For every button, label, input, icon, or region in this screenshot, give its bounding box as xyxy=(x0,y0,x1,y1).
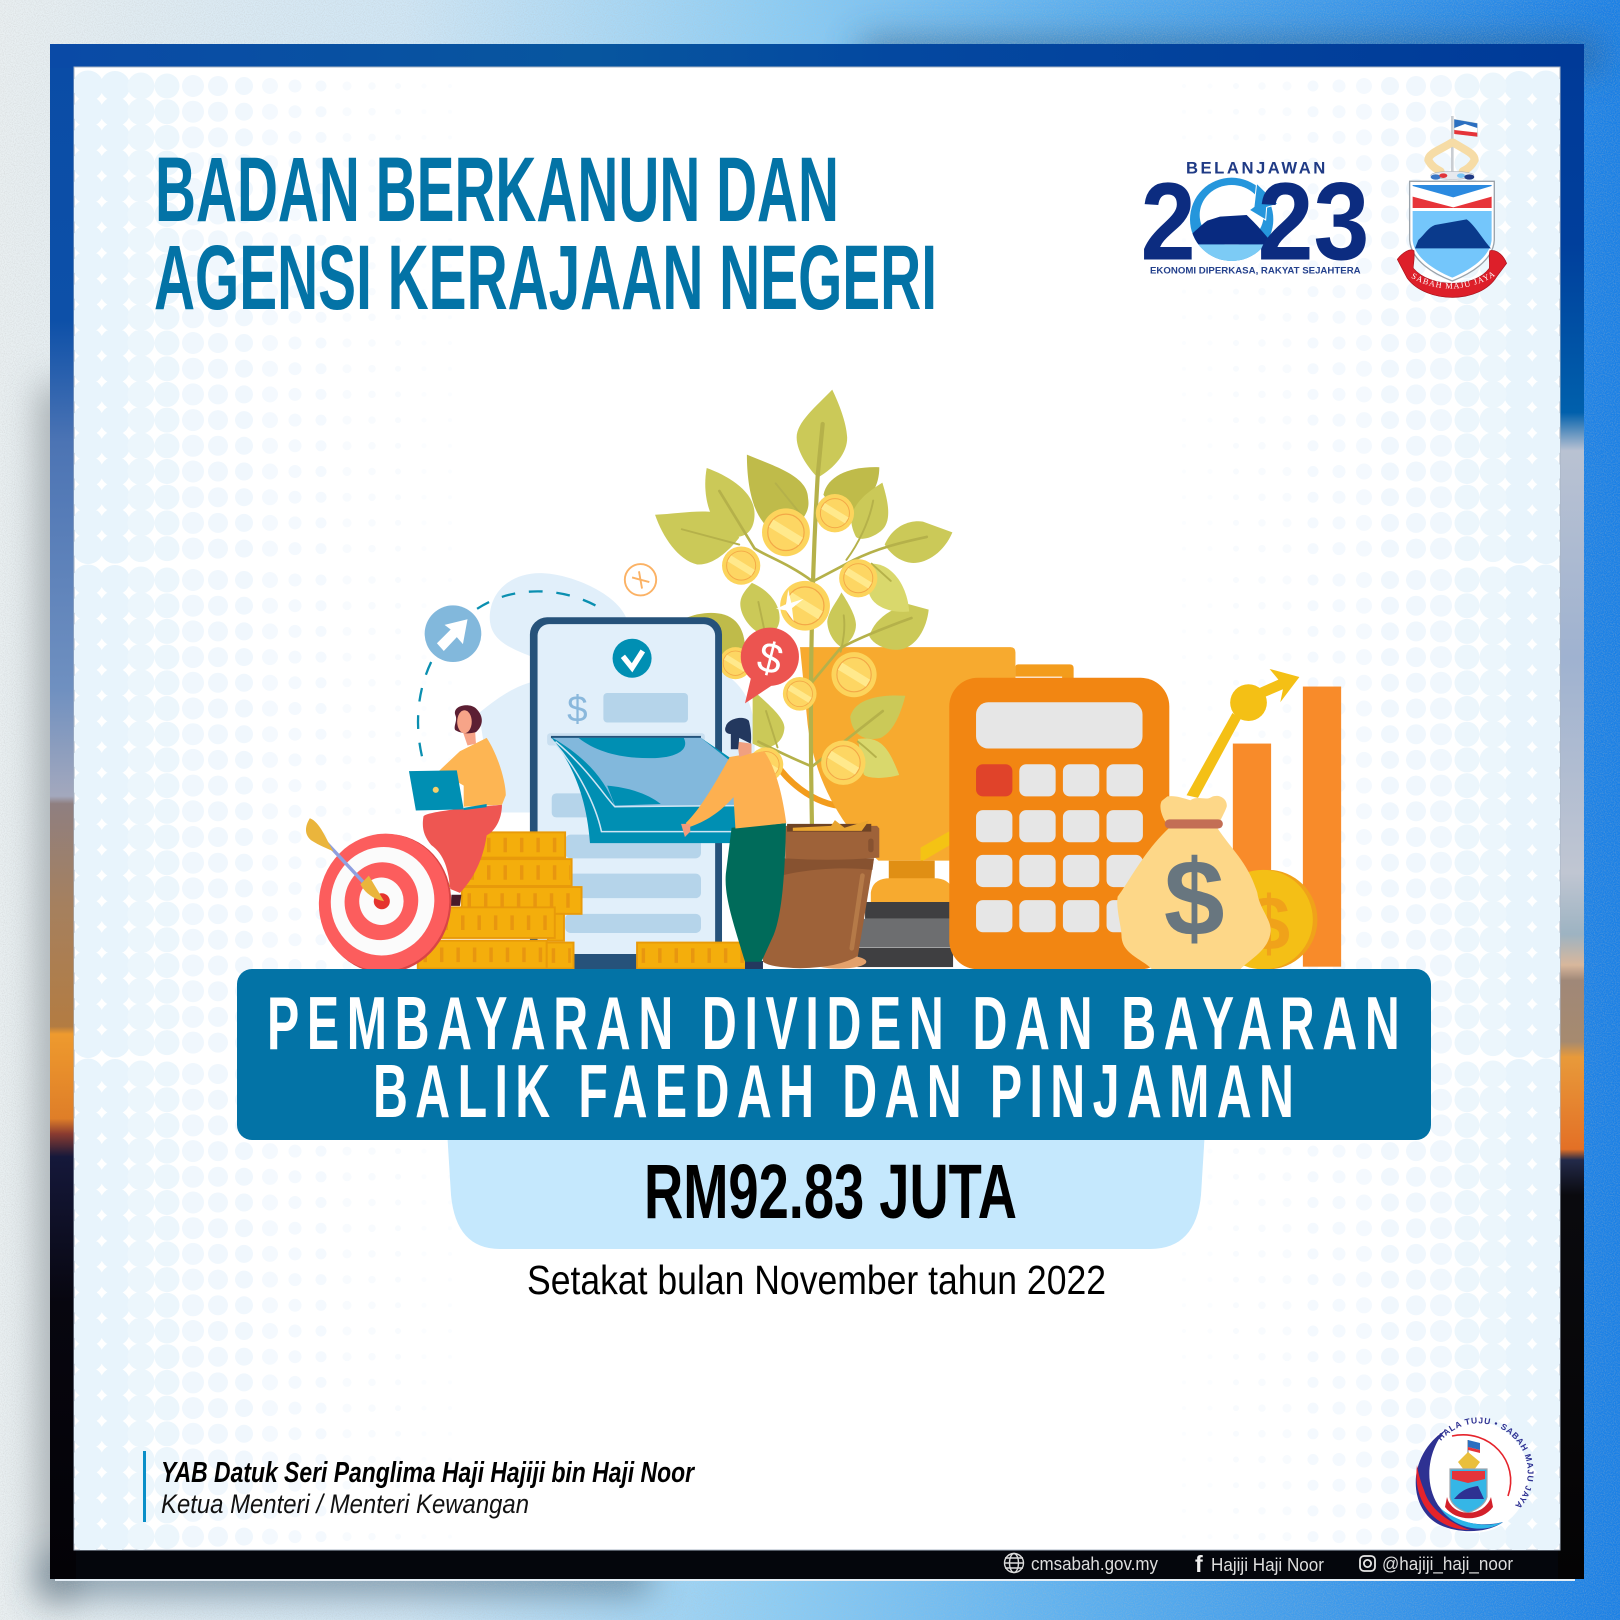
icon: dollar coin: $ xyxy=(1248,882,1290,967)
illustration: money plant xyxy=(655,390,952,826)
date note: Setakat bulan November tahun 2022 xyxy=(527,1257,1106,1303)
minister credit: Ketua Menteri / Menteri Kewangan xyxy=(161,1489,529,1519)
logo: Belanjawan 2023 xyxy=(1144,162,1366,275)
illustration: gold coin stacks xyxy=(418,832,747,969)
social links bar: cmsabah.gov.my xyxy=(1031,1554,1158,1574)
illustration: back layer (blobs, arc, arrow badge, plus) xyxy=(418,564,755,812)
illustration: smartphone with banknote xyxy=(530,617,737,969)
title: BADAN BERKANUN DAN xyxy=(155,139,839,241)
icon: archery target with arrow xyxy=(306,818,464,985)
coins on the plant xyxy=(719,494,877,785)
illustration: woman with laptop xyxy=(409,705,506,906)
icon: instagram xyxy=(1360,1556,1375,1571)
banner heading: PEMBAYARAN DIVIDEN DAN BAYARAN xyxy=(267,982,1400,1066)
social links bar xyxy=(1004,1551,1513,1577)
icon: globe xyxy=(1004,1554,1024,1572)
title: AGENSI KERAJAAN NEGERI xyxy=(154,227,937,329)
amount tab xyxy=(447,1130,1205,1249)
icon: money bag xyxy=(1117,796,1271,969)
illustration: trophy xyxy=(766,647,1074,967)
social links bar: @hajiji_haji_noor xyxy=(1382,1554,1513,1575)
illustration: plant pot xyxy=(763,820,879,969)
banner heading: BALIK FAEDAH DAN PINJAMAN xyxy=(373,1050,1294,1134)
logo: Belanjawan 2023: BELANJAWAN xyxy=(1186,158,1325,177)
illustration: man holding banknote xyxy=(681,718,786,969)
icon: dollar coin xyxy=(1213,870,1317,969)
icon: arrow badge xyxy=(425,605,481,662)
icon: plus badge xyxy=(625,564,656,595)
speech bubble with dollar: $ xyxy=(753,633,788,685)
banner heading xyxy=(237,969,1431,1140)
logo: Belanjawan 2023: 2 xyxy=(1141,160,1196,283)
social links bar: Hajiji Haji Noor xyxy=(1211,1555,1324,1575)
logo: Belanjawan 2023: EKONOMI DIPERKASA, RAKYAT SEJAHTERA xyxy=(1150,265,1361,275)
logo: Hala Tuju Sabah Maju Jaya: HALA TUJU • SABAH MAJU JAYA xyxy=(1437,1417,1534,1508)
amount tab: RM92.83 JUTA xyxy=(644,1149,1017,1235)
title xyxy=(154,139,937,329)
social links bar: f xyxy=(1195,1551,1203,1577)
minister credit: YAB Datuk Seri Panglima Haji Hajiji bin Haji Noor xyxy=(161,1457,695,1489)
illustration: smartphone with banknote: $ xyxy=(567,688,588,729)
logo: Sabah state crest: SABAH MAJU JAYA xyxy=(1412,272,1496,289)
icon: money bag: $ xyxy=(1164,838,1225,960)
logo: Belanjawan 2023: 23 xyxy=(1258,160,1369,283)
illustration: chart bars and growth arrow xyxy=(1187,669,1341,967)
minister credit xyxy=(143,1451,695,1522)
speech bubble with dollar xyxy=(741,628,799,703)
illustration: calculator xyxy=(949,678,1169,969)
logo: Sabah state crest xyxy=(1396,116,1507,298)
logo: Hala Tuju Sabah Maju Jaya xyxy=(1416,1417,1534,1533)
